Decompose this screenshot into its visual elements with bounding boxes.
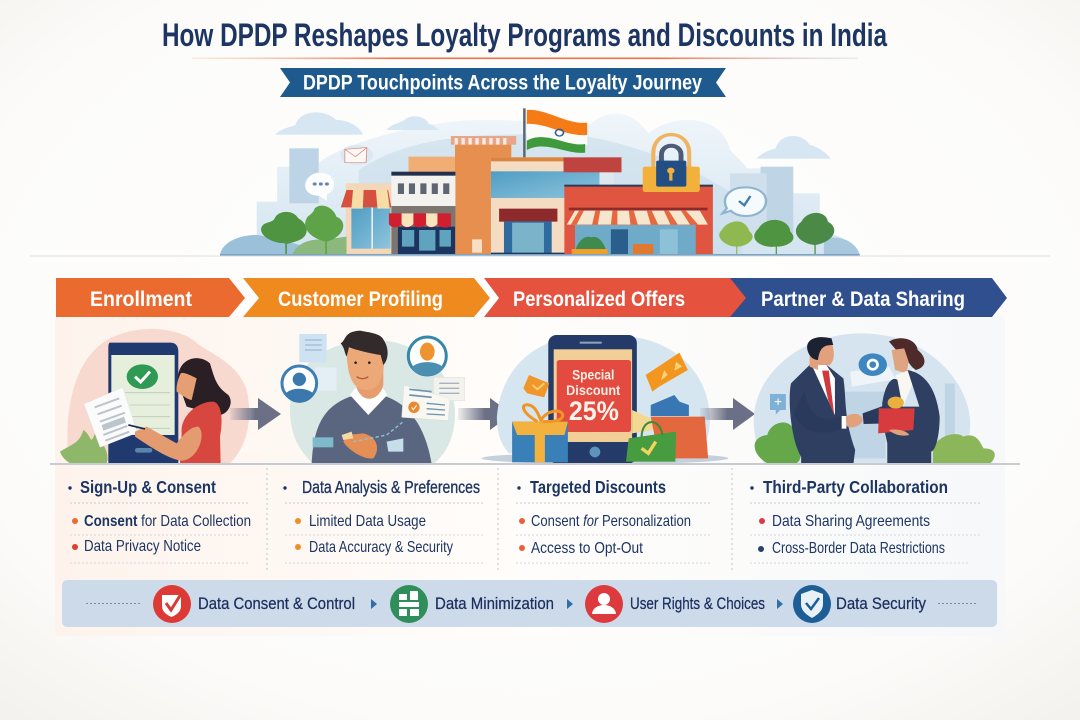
left stores: [341, 172, 455, 254]
principle: user rights: [585, 585, 783, 623]
ground line: [50, 463, 1020, 465]
leaves: [60, 430, 108, 463]
avatar right: [408, 337, 446, 376]
bottom principles bar: [62, 580, 997, 627]
step 3 illustration: offers: [482, 335, 728, 464]
gear cloud: [850, 353, 896, 387]
principle: security: [793, 585, 926, 623]
step 1 illustration: enrollment: [60, 329, 249, 463]
phone: 25%: [569, 396, 619, 426]
padlock: [643, 135, 700, 192]
item: Consent for Data Collection: [84, 513, 251, 530]
dome bg: [754, 333, 970, 463]
arrow: enrollment to profiling: [230, 398, 281, 430]
phone: [108, 343, 178, 463]
tags: [523, 353, 688, 397]
subtitle ribbon: [280, 68, 726, 97]
woman: [863, 338, 940, 463]
subtitle ribbon: DPDP Touchpoints Across the Loyalty Journey: [303, 72, 702, 94]
principle: minimization: [390, 585, 573, 623]
arrow: profiling to offers: [458, 398, 512, 430]
principle: consent: Data Consent & Control: [198, 594, 355, 613]
phone: Discount: [566, 382, 621, 398]
banner: partner and data sharing: [730, 278, 1007, 317]
right store: [564, 185, 713, 255]
principle: consent: [153, 585, 377, 623]
item: Data Privacy Notice: [84, 538, 201, 555]
banner: enrollment: Enrollment: [90, 288, 192, 311]
principle: security: Data Security: [836, 594, 926, 613]
icon: check bubble: [723, 187, 766, 216]
column 1 list: [68, 477, 251, 563]
document: [84, 387, 137, 447]
banner: personalized offers: [484, 278, 748, 317]
lower panel: [55, 316, 1005, 636]
heading: Third-Party Collaboration: [763, 477, 948, 497]
column 4 list: [750, 477, 982, 563]
item: Access to Opt-Out: [531, 540, 643, 557]
phone: Special: [572, 366, 614, 382]
step banners: [56, 278, 1007, 317]
column 2 list: [283, 477, 484, 563]
banner: customer profiling: [243, 278, 490, 317]
man: [312, 331, 432, 464]
banner: enrollment: [56, 278, 245, 317]
step 4 illustration: partners: [754, 333, 995, 463]
woman: [128, 358, 231, 463]
phone: [548, 335, 637, 463]
banner: customer profiling: Customer Profiling: [278, 288, 443, 311]
column 3 list: [516, 477, 712, 563]
item: Data Sharing Agreements: [772, 513, 930, 530]
heading: Targeted Discounts: [530, 477, 666, 497]
step 2 illustration: profiling: [282, 331, 465, 464]
item: Cross-Border Data Restrictions: [772, 540, 945, 557]
banner: partner and data sharing: Partner & Data Sharing: [761, 288, 965, 311]
icon: envelope bubble: [340, 145, 373, 165]
bushes: [755, 422, 995, 463]
circle bg: [497, 337, 710, 453]
heading: Sign-Up & Consent: [80, 477, 216, 497]
circle bg: [290, 340, 455, 464]
blob: [67, 329, 249, 463]
trees: [220, 206, 860, 256]
item: Data Accuracy & Security: [309, 539, 453, 556]
item: Consent for Personalization: [531, 513, 691, 530]
principle: minimization: Data Minimization: [435, 594, 554, 613]
gift box: [512, 405, 568, 462]
tower building: [408, 136, 516, 255]
center building: [491, 157, 621, 255]
handshake: [846, 414, 863, 427]
heading: Data Analysis & Preferences: [302, 477, 480, 497]
icon: chat bubble: [305, 173, 334, 201]
hills and clouds: [220, 112, 860, 255]
item: Limited Data Usage: [309, 513, 426, 530]
man: [790, 337, 855, 463]
storefront scene: [220, 108, 860, 256]
data cards: [402, 377, 465, 421]
principle: user rights: User Rights & Choices: [630, 594, 765, 613]
flag: [523, 108, 587, 158]
arrow: offers to sharing: [700, 398, 755, 430]
avatar left: [282, 366, 317, 403]
banner: personalized offers: Personalized Offers: [513, 288, 685, 311]
shopping bags: [626, 395, 708, 462]
chat icon: [770, 394, 786, 415]
notes: [299, 334, 337, 391]
